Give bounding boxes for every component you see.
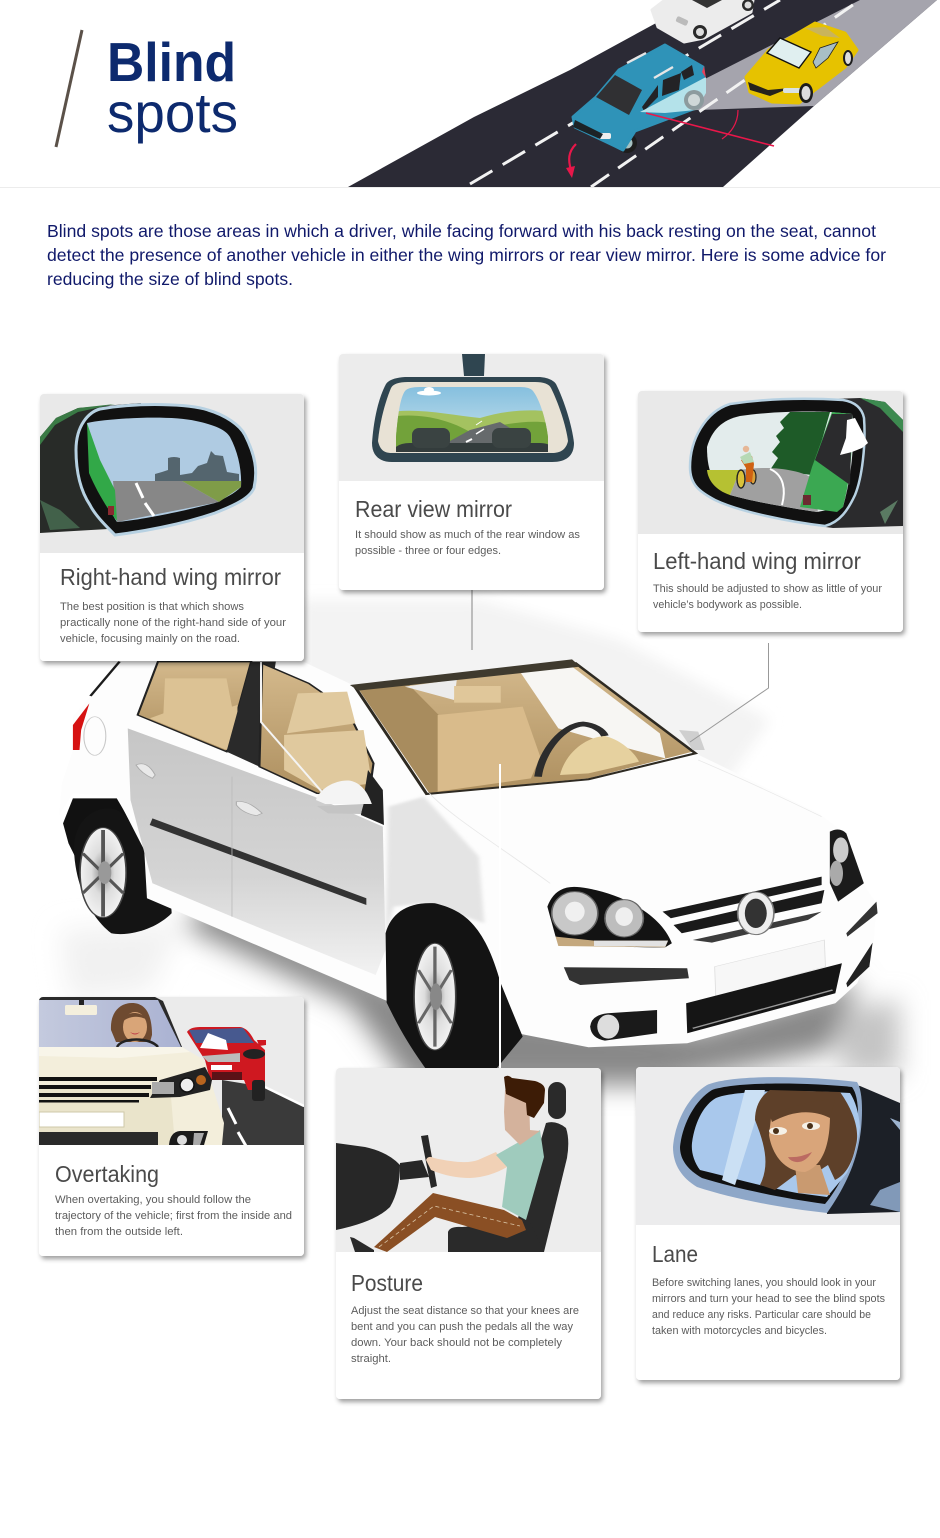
description: Adjust the seat distance so that your knees are xyxy=(351,1305,579,1317)
intro paragraph xyxy=(47,221,886,289)
description xyxy=(351,1305,579,1365)
side door panels xyxy=(128,728,386,975)
red guide lines xyxy=(569,110,774,170)
description: and reduce any risks. Particular care should be xyxy=(652,1309,871,1321)
illustration: posture xyxy=(336,1068,601,1252)
intro paragraph: detect the presence of another vehicle in either the wing mirrors or rear view mirror. Here is some advice for xyxy=(47,245,886,265)
windshield xyxy=(358,662,693,793)
blind spot wedge xyxy=(694,0,936,110)
door handles xyxy=(136,764,262,816)
panel: left-hand wing mirror xyxy=(638,391,903,632)
number plate xyxy=(39,1112,124,1127)
description: vehicle, focusing mainly on the road. xyxy=(60,633,240,645)
rear seat in side window xyxy=(150,678,237,750)
description: The best position is that which shows xyxy=(60,601,245,613)
front wheel xyxy=(386,903,523,1070)
heading: Right-hand wing mirror xyxy=(60,564,281,590)
lower grille xyxy=(39,1132,158,1145)
grille emblem xyxy=(738,892,774,935)
side mirror xyxy=(316,770,384,825)
fuel cap xyxy=(84,717,106,755)
car body xyxy=(59,660,876,1047)
panel: rear view mirror xyxy=(339,354,604,590)
panel: right-hand wing mirror xyxy=(40,394,304,661)
number plate recess xyxy=(715,940,825,997)
intro paragraph: reducing the size of blind spots. xyxy=(47,269,293,289)
grille xyxy=(39,1077,157,1102)
roof rails xyxy=(627,53,673,78)
far side mirror xyxy=(679,730,705,750)
fog lamp xyxy=(169,1131,208,1145)
car ground shadow xyxy=(60,900,900,1085)
driver xyxy=(111,1003,158,1047)
steering column and wheel xyxy=(400,1135,437,1188)
illustration: lane xyxy=(636,1067,900,1225)
description xyxy=(652,1277,885,1337)
description: It should show as much of the rear window as xyxy=(355,529,580,541)
heading: Lane xyxy=(652,1241,698,1267)
yellow car xyxy=(746,23,857,103)
rear pillar edge lines xyxy=(90,662,120,696)
front seat headrest through side window xyxy=(284,692,372,790)
bumper details xyxy=(564,902,878,987)
panel: overtaking xyxy=(39,997,304,1256)
hair xyxy=(504,1076,545,1118)
woman neck xyxy=(795,1165,830,1195)
rear wheel xyxy=(74,808,172,934)
description xyxy=(653,583,882,611)
road surface xyxy=(348,0,937,187)
description: When overtaking, you should follow the xyxy=(55,1194,251,1206)
woman face xyxy=(769,1109,830,1172)
mirror glass: city and road xyxy=(87,418,241,522)
red car xyxy=(187,1027,266,1101)
front side window xyxy=(259,663,373,795)
mirror glass: countryside xyxy=(396,387,548,452)
heading: Posture xyxy=(351,1270,423,1296)
title word: Blind: Blind xyxy=(107,31,236,93)
right headlight xyxy=(830,830,864,902)
description: down. Your back should not be completely xyxy=(351,1337,562,1349)
connector: right mirror xyxy=(261,662,322,792)
driver arm and hand xyxy=(426,1152,507,1178)
description: trajectory of the vehicle; first from the inside and xyxy=(55,1210,292,1222)
description: practically none of the right-hand side of your xyxy=(60,617,286,629)
panel: posture xyxy=(336,1068,601,1399)
description: taken with motorcycles and bicycles. xyxy=(652,1325,827,1337)
connector: rear view mirror xyxy=(471,590,473,650)
windshield frame xyxy=(355,663,695,794)
illustration: right wing mirror xyxy=(40,394,304,553)
mirror glass: cyclist and trees xyxy=(707,411,853,512)
shoe xyxy=(350,1237,374,1252)
stitching xyxy=(379,1206,520,1247)
door seam xyxy=(231,777,233,917)
neck and head xyxy=(504,1090,540,1145)
description: vehicle’s bodywork as possible. xyxy=(653,599,802,611)
header illustration: road with cars xyxy=(348,0,937,187)
road ahead xyxy=(222,1080,304,1146)
heading: Left-hand wing mirror xyxy=(653,548,861,574)
description: then from the outside left. xyxy=(55,1226,183,1238)
description: possible - three or four edges. xyxy=(355,545,501,557)
fog lamp xyxy=(590,1010,657,1041)
cyclist xyxy=(737,446,756,488)
title slash xyxy=(56,30,82,147)
shirt xyxy=(496,1130,544,1220)
dashboard xyxy=(336,1143,400,1230)
description xyxy=(355,529,580,557)
backdrop glow behind car xyxy=(300,600,770,790)
bonnet crease xyxy=(429,760,822,883)
white car xyxy=(652,0,754,42)
body side strip xyxy=(150,818,366,905)
cream car body xyxy=(39,1047,224,1145)
lane markings xyxy=(470,0,860,187)
description: straight. xyxy=(351,1353,391,1365)
header divider xyxy=(0,187,940,188)
red turning arrow head xyxy=(566,166,575,178)
connector: posture xyxy=(499,764,501,1068)
blue car xyxy=(573,45,706,153)
woman hair xyxy=(755,1090,857,1190)
title xyxy=(56,30,238,147)
mirror glass with woman xyxy=(692,1090,860,1197)
headlight xyxy=(150,1067,212,1098)
title word: spots: spots xyxy=(107,81,238,144)
intro paragraph: Blind spots are those areas in which a driver, while facing forward with his back resting on the seat, cannot xyxy=(47,221,876,241)
panel: lane xyxy=(636,1067,900,1380)
front wing shading xyxy=(386,797,484,937)
seat xyxy=(448,1082,568,1252)
heading: Rear view mirror xyxy=(355,496,512,522)
dark pillar xyxy=(226,662,276,767)
rear wheel arch xyxy=(63,798,150,903)
description: mirrors and turn your head to see the blind spots xyxy=(652,1293,885,1305)
front headlight xyxy=(547,887,672,947)
tail light xyxy=(73,703,89,750)
description xyxy=(60,601,286,645)
description: This should be adjusted to show as little of your xyxy=(653,583,882,595)
mirror of car xyxy=(200,1033,228,1050)
trousers xyxy=(374,1193,526,1252)
illustration: overtaking xyxy=(39,997,304,1146)
description: Before switching lanes, you should look in your xyxy=(652,1277,876,1289)
driver seat xyxy=(438,707,540,792)
illustration: left wing mirror xyxy=(638,391,903,534)
radiator grille xyxy=(663,877,824,943)
rear side window xyxy=(138,662,251,752)
heading: Overtaking xyxy=(55,1161,159,1187)
illustration: rear view mirror xyxy=(339,354,604,481)
steering wheel xyxy=(538,724,605,777)
lower air intake xyxy=(686,963,842,1033)
blue car highlight inside wedge xyxy=(640,77,706,113)
description: bent and you can push the pedals all the way xyxy=(351,1321,574,1333)
connector: left mirror xyxy=(690,643,768,742)
main white car photo illustration xyxy=(59,659,878,1070)
description xyxy=(55,1194,292,1238)
